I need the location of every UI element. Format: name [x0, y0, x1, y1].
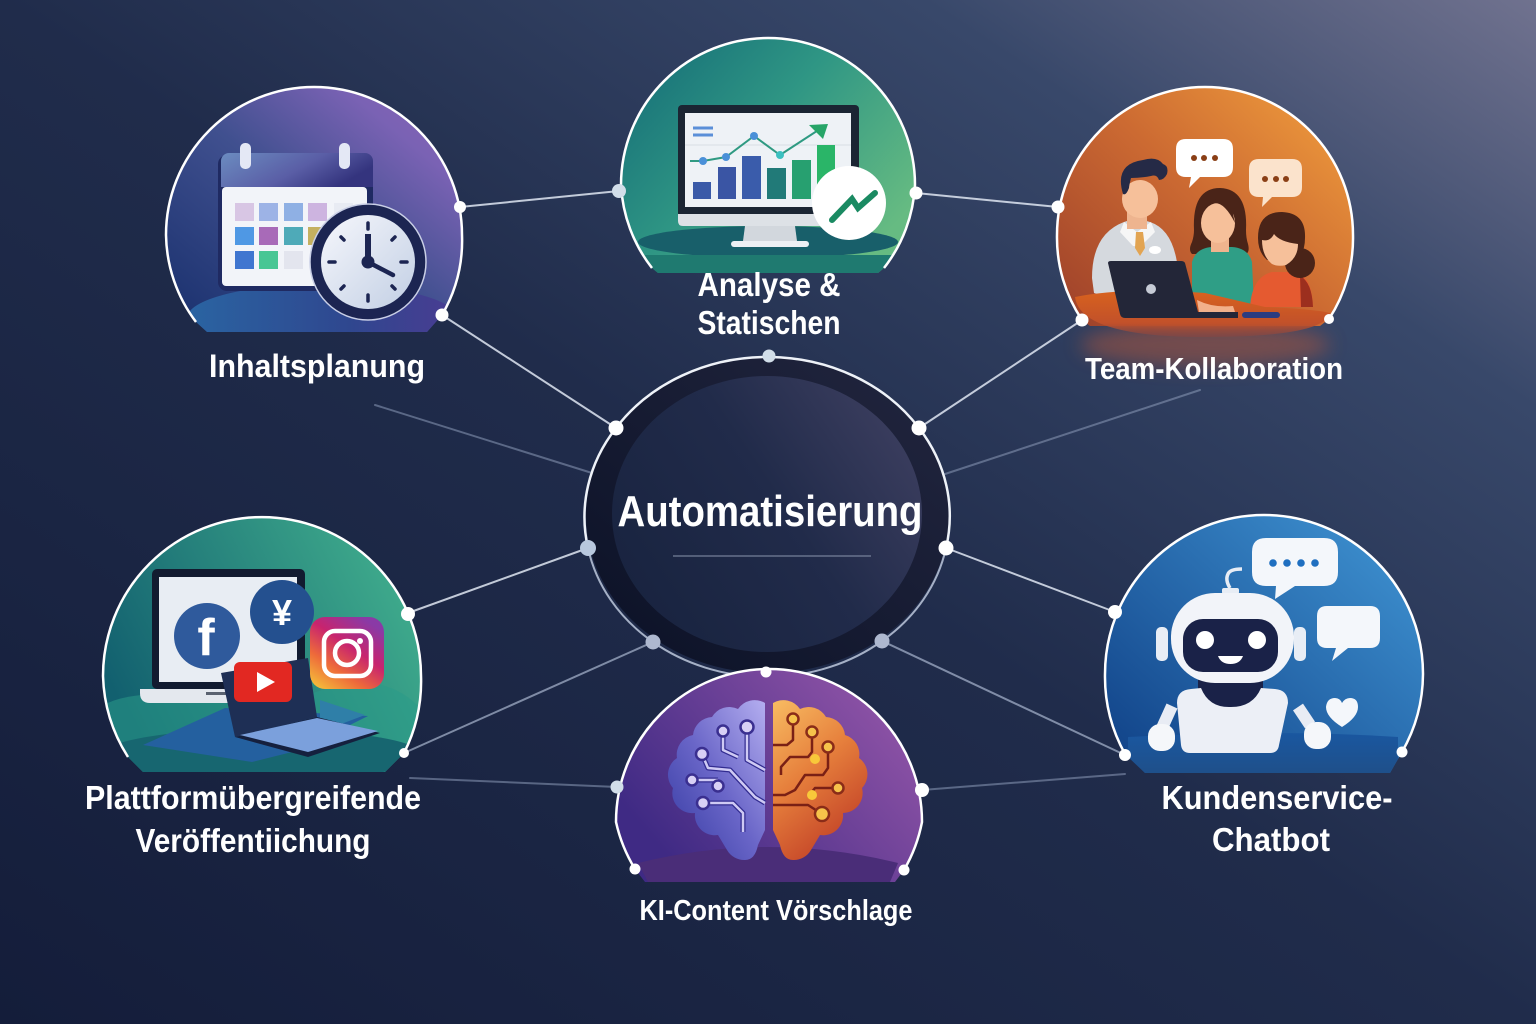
connector node dots	[399, 184, 1408, 876]
panel: KI-Content Vorschlage	[616, 669, 922, 927]
icon: instagram	[310, 617, 384, 689]
icon: papers	[143, 658, 380, 762]
icon: currency badge: ¥	[272, 592, 292, 633]
title: Automatisierung: Automatisierung	[618, 487, 922, 536]
label: KI-Content Vorschlage: KI-Content Vörschlage	[640, 895, 912, 927]
label: Plattformübergreifende Veröffentiichung	[85, 779, 421, 859]
label: Kundenservice-Chatbot: Chatbot	[1212, 821, 1330, 858]
label: Plattformübergreifende Veröffentiichung: Plattformübergreifende	[85, 779, 421, 816]
label: Team-Kollaboration: Team-Kollaboration	[1085, 351, 1343, 386]
label: Analyse & Statischen	[698, 266, 840, 341]
icon: laptop	[140, 569, 305, 703]
icon: brain	[668, 700, 867, 860]
connector lines	[375, 191, 1200, 790]
icon: youtube	[234, 662, 292, 702]
icon: calendar	[218, 143, 373, 291]
icon: facebook: f	[197, 609, 215, 667]
label: Analyse & Statischen: Statischen	[698, 304, 840, 341]
label: Kundenservice-Chatbot	[1162, 779, 1392, 858]
central hub	[584, 357, 950, 677]
icon: team people	[1075, 159, 1330, 337]
icon: chat bubbles	[1176, 139, 1302, 207]
icon: trend badge	[812, 166, 886, 240]
label: Inhaltsplanung: Inhaltsplanung	[209, 348, 425, 384]
panel: Team-Kollaboration	[1057, 87, 1353, 386]
panel: Kundenservice-Chatbot	[1105, 515, 1423, 858]
icon: clock	[310, 204, 426, 320]
label: Plattformübergreifende Veröffentiichung: Veröffentiichung	[136, 822, 370, 859]
label: Analyse & Statischen: Analyse &	[698, 266, 840, 303]
icon: facebook	[174, 603, 240, 669]
panel: Analyse & Statistiken	[621, 38, 915, 341]
panel: Plattformübergreifende Veröffentlichung	[85, 517, 422, 859]
icon: currency badge	[250, 580, 314, 644]
icon: robot	[1148, 569, 1331, 753]
icon: chat bubbles and heart	[1252, 538, 1380, 727]
panel: Inhaltsplanung	[166, 87, 462, 384]
label: Kundenservice-Chatbot: Kundenservice-	[1162, 779, 1392, 816]
icon: monitor chart	[678, 105, 859, 247]
